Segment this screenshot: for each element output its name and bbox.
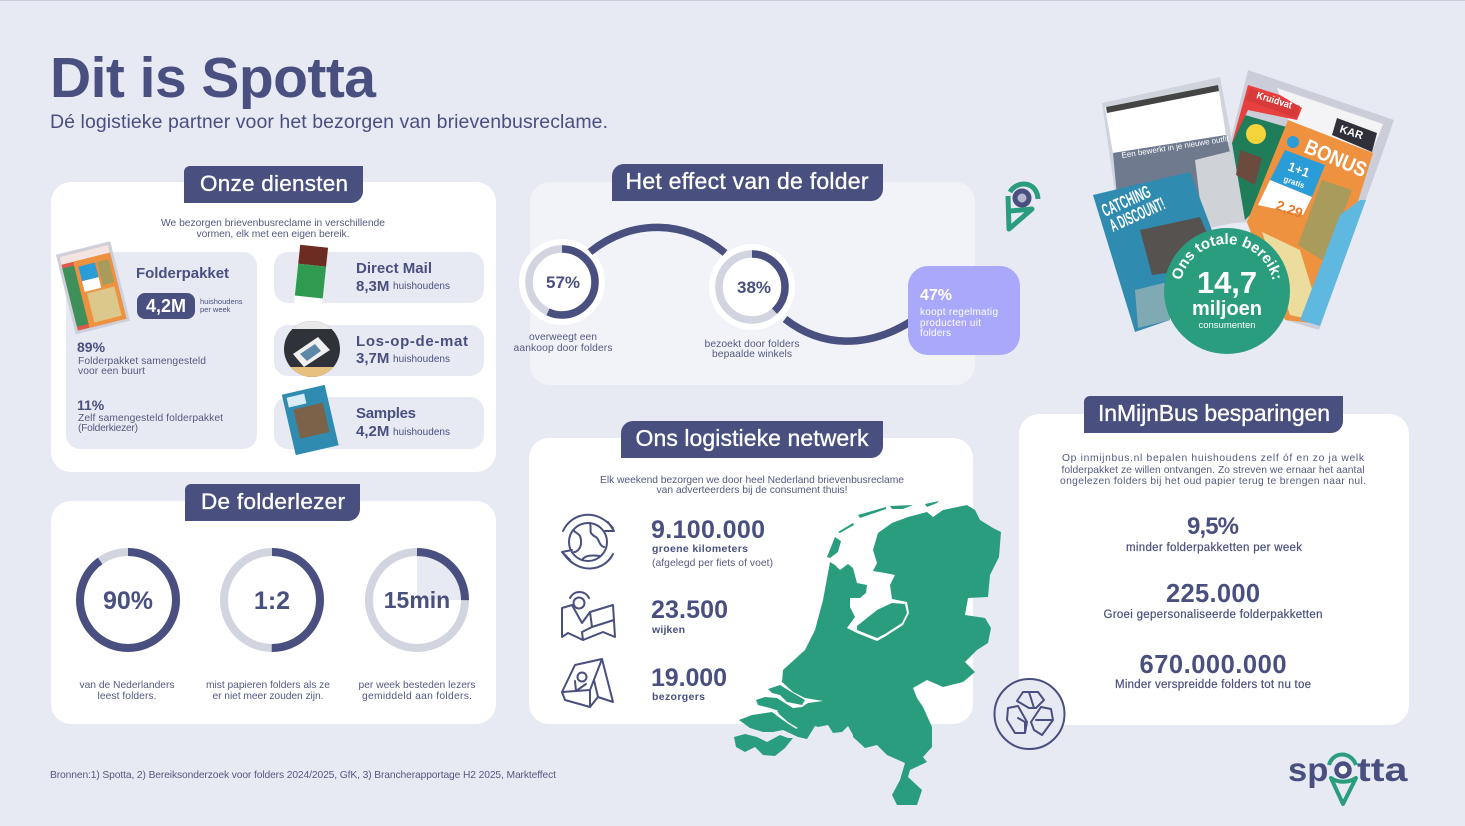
folderpakket panel: Folderpakket samengesteld: [78, 356, 206, 367]
donut captions: er niet meer zouden zijn.: [212, 691, 324, 702]
panel: de folderlezer: [51, 484, 496, 724]
folderpakket panel: (Folderkiezer): [78, 423, 138, 434]
donut 15min: [369, 552, 465, 648]
stat 225.000: [1104, 580, 1322, 621]
flyer: bonus package: BONUS: [1301, 135, 1370, 182]
intro text: [161, 218, 385, 240]
icon: sample magazine: [282, 385, 339, 455]
intro text: folderpakket ze willen ontvangen. Zo streven we ernaar het aantal: [1062, 465, 1364, 476]
flyer: bonus package: gratis: [1282, 174, 1306, 191]
los-op-de-mat row: [274, 321, 484, 378]
folderpakket panel: Folderpakket: [136, 265, 229, 282]
flyer: white document: Een bewerkt in je nieuwe outfit: [1121, 134, 1230, 160]
donut captions: leest folders.: [98, 691, 156, 702]
stat 225.000: 225.000: [1166, 580, 1260, 608]
folderpakket panel: Zelf samengesteld folderpakket: [78, 413, 223, 424]
donut 38%: 38%: [737, 278, 771, 297]
stat: bezorgers: bezorgers: [652, 691, 705, 703]
stat: groene kilometers: 9.100.000: [651, 516, 765, 544]
icon: doormat: [284, 321, 340, 378]
badge: ons totale bereik: [1164, 228, 1290, 354]
direct mail row: Direct Mail: [356, 260, 432, 277]
folderpakket panel: huishoudens: [200, 297, 243, 306]
icon: recycle: [994, 679, 1064, 749]
donut captions: [80, 680, 476, 702]
intro text: [1060, 453, 1366, 487]
callout 47%: koopt regelmatig: [920, 307, 998, 318]
callout 47%: producten uit: [920, 318, 981, 329]
map: Nederland: [734, 501, 1001, 805]
stat: groene kilometers: [651, 516, 773, 569]
stat 9,5%: minder folderpakketten per week: [1126, 542, 1302, 554]
los-op-de-mat row: 3,7M: [356, 350, 389, 367]
badge: ons totale bereik: 14,7: [1197, 265, 1257, 300]
intro text: vormen, elk met een eigen bereik.: [196, 229, 350, 240]
connector arcs: [590, 227, 910, 341]
image: folder collage: [1093, 70, 1394, 354]
logo: spotta: [1288, 751, 1408, 804]
folderpakket panel: 11%: [77, 397, 105, 413]
panel: het effect van de folder: overweegt een: [529, 332, 597, 343]
samples row: [274, 385, 484, 455]
stat: groene kilometers: groene kilometers: [652, 543, 748, 555]
flyer: bonus package: 1+1: [1286, 159, 1312, 180]
logo: spotta: sp: [1288, 752, 1328, 789]
stat 9,5%: 9,5%: [1187, 513, 1239, 540]
callout 47%: folders: [920, 328, 951, 339]
stat 9,5%: [1126, 513, 1302, 554]
stat 670.000.000: Minder verspreidde folders tot nu toe: [1115, 679, 1311, 691]
panel: inmijnbus besparingen: [1019, 396, 1409, 725]
badge: ons totale bereik: Ons totale bereik:: [1172, 233, 1280, 280]
flyer: catching a discount: CATCHING: [1099, 182, 1154, 222]
heading: inmijnbus: [1084, 396, 1343, 433]
icon: direct mail: [294, 245, 328, 309]
stat: wijken: 23.500: [651, 596, 728, 624]
donut 57%: [519, 239, 605, 325]
stat badge 4,2M: 4,2M: [146, 296, 186, 316]
heading: de folderlezer: De folderlezer: [201, 489, 346, 514]
folderpakket panel: [56, 241, 257, 449]
icon: globe: [562, 515, 614, 569]
donut captions: mist papieren folders als ze: [206, 680, 330, 691]
stat 225.000: Groei gepersonaliseerde folderpakketten: [1104, 609, 1322, 621]
title: Dit is Spotta: [50, 46, 377, 110]
heading: onze diensten: Onze diensten: [200, 171, 348, 196]
flyer: bonus package: [1230, 70, 1394, 330]
heading: de folderlezer: [185, 484, 360, 521]
flyer: catching a discount: A DISCOUNT!: [1107, 194, 1169, 237]
heading: logistiek: [621, 421, 883, 458]
intro text: We bezorgen brievenbusreclame in verschillende: [161, 218, 385, 229]
heading: inmijnbus: InMijnBus besparingen: [1098, 400, 1330, 426]
heading: effect: Het effect van de folder: [626, 168, 869, 194]
folderpakket panel: 89%: [77, 339, 106, 355]
logo: spotta: tta: [1357, 751, 1408, 788]
stat: wijken: wijken: [651, 624, 685, 636]
heading: logistiek: Ons logistieke netwerk: [636, 425, 869, 451]
folderpakket panel: voor een buurt: [78, 366, 145, 377]
sources: Bronnen:1) Spotta, 2) Bereiksonderzoek voor folders 2024/2025, GfK, 3) Brancherapportage H2 2025, Markteffect: [50, 770, 556, 781]
stat 670.000.000: 670.000.000: [1140, 651, 1286, 679]
stat: groene kilometers: (afgelegd per fiets of voet): [652, 558, 773, 569]
donut 1:2: 1:2: [254, 587, 290, 615]
stat 670.000.000: [1115, 651, 1311, 691]
icon: green location pin: [1008, 184, 1038, 229]
badge: ons totale bereik: miljoen: [1192, 298, 1262, 320]
intro text: Op inmijnbus.nl bepalen huishoudens zelf óf en zo ja welk: [1062, 453, 1365, 464]
icon: map: [562, 592, 615, 640]
samples row: Samples: [356, 405, 416, 422]
los-op-de-mat row: Los-op-de-mat: [356, 333, 468, 350]
panel: het effect van de folder: bepaalde winkels: [712, 349, 792, 360]
subtitle: Dé logistieke partner voor het bezorgen van brievenbusreclame.: [50, 111, 608, 133]
callout 47%: [908, 266, 1020, 355]
heading: onze diensten: [184, 166, 363, 203]
donut 15min: 15min: [384, 587, 450, 613]
los-op-de-mat row: huishoudens: [393, 354, 450, 365]
flyer: bonus package: 2,29: [1274, 197, 1305, 221]
intro text: ongelezen folders bij het oud papier terug te brengen naar nul.: [1060, 476, 1366, 487]
donut 90%: 90%: [103, 587, 153, 615]
intro text: van adverteerders bij de consument thuis!: [656, 485, 848, 496]
donut captions: van de Nederlanders: [80, 680, 174, 691]
stat badge 4,2M: [137, 293, 195, 319]
donut 1:2: [224, 552, 320, 648]
intro text: [600, 475, 904, 496]
badge: ons totale bereik: consumenten: [1198, 320, 1256, 331]
flyer: catching a discount: [1093, 172, 1213, 332]
donut 57%: 57%: [546, 273, 580, 292]
panel: het effect van de folder: [514, 164, 1020, 385]
flyer: bonus package: KAR: [1338, 123, 1364, 142]
folderpakket panel: per week: [200, 305, 231, 314]
panel: het effect van de folder: bezoekt door folders: [704, 339, 800, 350]
direct mail row: huishoudens: [393, 281, 450, 292]
heading: effect: [612, 164, 883, 201]
panel: het effect van de folder: aankoop door folders: [514, 343, 612, 354]
direct mail row: [274, 245, 484, 309]
flyer: bonus package: Kruidvat: [1255, 90, 1294, 112]
stat: bezorgers: 19.000: [651, 664, 727, 692]
donut captions: gemiddeld aan folders.: [362, 691, 472, 702]
samples row: 4,2M: [356, 423, 389, 440]
icon: folder package: [56, 241, 130, 334]
direct mail row: 8,3M: [356, 278, 389, 295]
donut 90%: [80, 552, 176, 648]
intro text: Elk weekend bezorgen we door heel Nederland brievenbusreclame: [600, 475, 904, 486]
panel: onze diensten: [51, 166, 496, 472]
flyer: white document: [1102, 77, 1247, 247]
panel: ons logistieke netwerk: [529, 421, 973, 724]
donut captions: per week besteden lezers: [358, 680, 476, 691]
samples row: huishoudens: [393, 427, 450, 438]
callout 47%: 47%: [920, 287, 952, 304]
donut 38%: [709, 244, 795, 330]
icon: folded tent map: [562, 659, 613, 707]
